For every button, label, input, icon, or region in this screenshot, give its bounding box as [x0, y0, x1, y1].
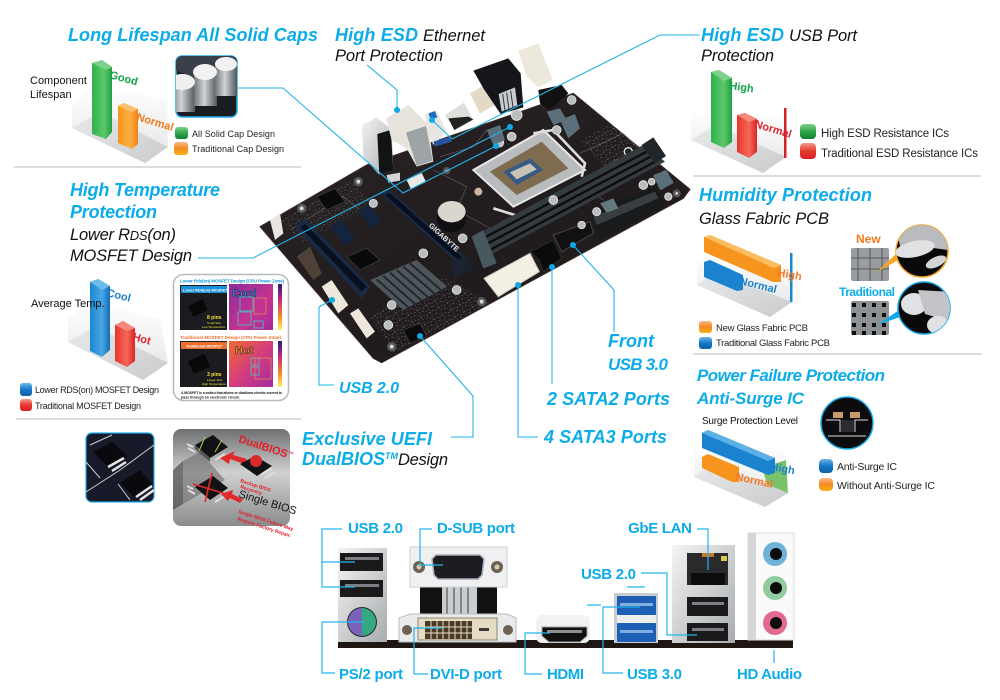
- photo lower: Lower RDS(on) MOSFET: [183, 288, 228, 292]
- slab: anti-surge: [702, 430, 775, 475]
- I/O leader: GbE LAN: [697, 529, 708, 570]
- heading: Humidity Protection: [699, 185, 872, 228]
- chokes: [487, 108, 673, 190]
- HDMI connector: [536, 615, 590, 643]
- leader line: SATA2: [551, 267, 553, 384]
- heading: High ESD USB: High ESD: [701, 25, 784, 45]
- I/O leader: HD Audio: [773, 650, 775, 663]
- PCIe x1 slots: [330, 204, 382, 245]
- label: good: Good: [108, 69, 139, 88]
- chips on board: [317, 188, 427, 343]
- bar: normal: [118, 103, 138, 149]
- heading: High ESD Ethernet: High ESD: [335, 25, 418, 45]
- legend: surge: [819, 459, 935, 492]
- label: Traditional: Traditional: [839, 285, 895, 299]
- CPU socket: [473, 130, 585, 217]
- heading: Power Failure: Power Failure Protection: [697, 366, 885, 385]
- bar: normal: [737, 113, 757, 158]
- dense components right: [580, 123, 643, 173]
- label: high: High: [776, 267, 803, 283]
- panel title traditional: Traditional MOSFET Design (CPU Power Zone): [180, 335, 281, 340]
- legend: caps: Traditional Cap Design: [192, 144, 284, 154]
- I/O label: USB 3.0: USB 3.0: [627, 666, 682, 683]
- USB 3.0 stack: [614, 593, 658, 643]
- chart floor: [68, 326, 168, 380]
- leader line: USB 2.0 header: [319, 300, 334, 385]
- front panel header white pins: [350, 308, 375, 338]
- legend: ESD: Traditional ESD Resistance ICs: [821, 148, 978, 160]
- label: Front USB 3.0: [608, 331, 669, 374]
- axis label: Component: [30, 75, 87, 87]
- heading: UEFI DualBIOS: Exclusive UEFI: [302, 429, 433, 449]
- chart wall: [72, 85, 168, 163]
- colour scale: [278, 341, 282, 387]
- chipset heatsink: [370, 260, 447, 310]
- dense components upper left: [280, 180, 373, 243]
- axis label: Average Temp.: [31, 298, 105, 310]
- legend: MOSFET: [20, 383, 159, 411]
- board outline: [260, 93, 690, 363]
- leader line: High Temperature: [198, 127, 510, 258]
- slab: new: [704, 235, 781, 282]
- SATA connectors black: [531, 240, 562, 272]
- heading: UEFI DualBIOS: [302, 429, 448, 469]
- green wall section: [762, 460, 788, 493]
- leader line: Ethernet: [367, 65, 397, 110]
- image: anti-surge IC: [821, 397, 873, 449]
- VGA connector: [410, 547, 507, 616]
- legend: caps: [174, 127, 284, 155]
- chart floor: [72, 112, 168, 163]
- thermal image cool: Cool: [232, 288, 256, 300]
- fabric swatch: traditional: [851, 301, 903, 335]
- power connector top right: [538, 85, 568, 110]
- I/O label: D-SUB: D-SUB port: [437, 520, 515, 537]
- panel: lifespan chart: [30, 60, 175, 163]
- dense components lower edge: [370, 277, 490, 353]
- I/O label: USB 2.0 right: USB 2.0: [581, 566, 636, 583]
- label: USB 2.0 header: USB 2.0: [339, 380, 399, 397]
- footnote second line: pass through an electronic circuit.: [181, 396, 240, 400]
- legend: MOSFET: Lower RDS(on) MOSFET Design: [35, 385, 159, 395]
- CMOS battery: [437, 201, 466, 232]
- bar: cool: [90, 279, 110, 357]
- heading: Long Lifespan: Long Lifespan All Solid Caps: [68, 25, 318, 45]
- divider: [693, 175, 981, 177]
- panel: rear I/O: [338, 533, 794, 648]
- fabric closeup: traditional: [898, 282, 952, 334]
- photo lower: Low Temperature: [202, 325, 225, 329]
- image: capacitors: [169, 56, 237, 117]
- photo traditional: Larger Size: [207, 378, 223, 382]
- footnote: A MOSFET is a switch that allows or disallows electric current to: [181, 391, 283, 395]
- photo traditional: [180, 341, 227, 387]
- heading: UEFI DualBIOS: DualBIOS: [302, 449, 385, 469]
- bar: good: [92, 60, 112, 139]
- ATX power connector: [590, 170, 673, 240]
- photo lower: 8 pins: [207, 315, 222, 321]
- thermal image hot: Hot: [235, 345, 254, 357]
- I/O leader: DVI-D: [414, 628, 442, 674]
- USB 3.0 header: [553, 222, 593, 252]
- recovery note: Backup BIOS: [239, 478, 272, 494]
- chart floor: [697, 272, 792, 317]
- label: 4 SATA3: 4 SATA3 Ports: [543, 427, 667, 447]
- I/O: USB 3.0: [425, 111, 452, 147]
- panel title lower: Lower Rds(on) MOSFET Design (CPU Power Zone): [180, 278, 284, 284]
- PCIe x16 slot upper: [381, 189, 473, 278]
- leader line: Long Lifespan caps: [238, 88, 496, 193]
- heading: High Temperature: MOSFET Design: [70, 247, 192, 265]
- label: cool: Cool: [105, 287, 132, 305]
- arrow: single BIOS: [221, 490, 243, 503]
- image: BIOS chips: [86, 433, 154, 502]
- DVI connector: [399, 614, 516, 642]
- USB header white pins: [322, 280, 348, 313]
- I/O leader: PS/2: [322, 622, 363, 673]
- legend: surge: Without Anti-Surge IC: [837, 480, 935, 492]
- legend: surge: Anti-Surge IC: [837, 461, 897, 473]
- chart wall: [691, 110, 786, 173]
- silkscreen text: GIGABYTE: [427, 221, 461, 254]
- I/O: VGA: [473, 58, 523, 114]
- fabric closeup: new: [894, 225, 948, 277]
- heading: High ESD USB: [701, 25, 858, 65]
- label: high: High: [769, 461, 796, 477]
- label: 2 SATA2: 2 SATA2 Ports: [546, 389, 670, 409]
- legend: PCB: Traditional Glass Fabric PCB: [716, 338, 830, 349]
- I/O label: PS/2: PS/2 port: [339, 666, 403, 683]
- slab highlight: [704, 235, 781, 268]
- heading: Humidity Protection: Humidity Protection: [699, 185, 872, 205]
- label: Front USB 3.0: USB 3.0: [608, 355, 669, 374]
- divider: [693, 353, 982, 355]
- leader line: USB port: [432, 35, 700, 139]
- I/O: DVI: [470, 84, 495, 113]
- chip: single BIOS: [187, 473, 228, 502]
- callout dots: [329, 107, 576, 339]
- capacitors: [369, 96, 672, 329]
- I/O leader: HDMI: [525, 633, 550, 674]
- label: high: High: [729, 80, 755, 95]
- heading: High Temperature: High Temperature: [70, 180, 220, 200]
- wall edge: [784, 108, 786, 158]
- heading: High Temperature: Protection: [70, 202, 157, 222]
- chart floor: [694, 462, 788, 507]
- heading: Power Failure: [696, 366, 885, 408]
- label: New: New: [856, 232, 881, 246]
- legend: ESD: High ESD Resistance ICs: [821, 128, 949, 140]
- circuit traces: [290, 130, 637, 230]
- I/O shield: LAN and USB: [386, 105, 433, 167]
- label: normal: Normal: [135, 111, 175, 134]
- chart wall: [68, 300, 168, 380]
- heading: Humidity Protection: Glass Fabric PCB: [699, 210, 829, 228]
- label: DualBIOS: ™: [287, 450, 294, 459]
- audio jacks: [748, 533, 794, 640]
- panel: surge chart: [694, 430, 796, 507]
- I/O: HDMI: [445, 103, 473, 131]
- fabric swatch: new: [851, 248, 902, 281]
- photo lower: [180, 285, 228, 330]
- legend: PCB: New Glass Fabric PCB: [716, 323, 808, 334]
- heading: UEFI DualBIOS: TM: [385, 451, 399, 461]
- leader line: SATA3: [518, 285, 538, 437]
- legend: ESD: [800, 124, 978, 160]
- small white parts: [407, 148, 632, 189]
- photo traditional: 3 pins: [207, 372, 222, 378]
- RAM slots: [472, 137, 666, 268]
- chip: backup BIOS: [240, 455, 275, 478]
- heading: Power Failure: Anti-Surge IC: [696, 389, 805, 408]
- photo lower: Small Size: [207, 321, 222, 325]
- failure note: Single BIOS Failure May: [237, 509, 294, 533]
- LAN and USB stack: [672, 545, 735, 643]
- axis label second line: Lifespan: [30, 89, 72, 101]
- I/O leader: USB 2.0 right: [641, 573, 697, 635]
- colour scale: [278, 284, 282, 330]
- heading: High Temperature: [70, 180, 220, 265]
- failure note second line: Require Factory Repair.: [236, 516, 292, 539]
- USB and PS/2 stack: [338, 548, 387, 642]
- SATA connectors white: [484, 253, 539, 297]
- label: DualBIOS: DualBIOS: [237, 433, 289, 461]
- photo traditional: Traditional MOSFET: [186, 344, 223, 348]
- arrow: recovery: [220, 451, 247, 464]
- legend: PCB: [699, 321, 830, 349]
- label: normal: Normal: [734, 471, 774, 491]
- heading: High Temperature: Lower RDS(on): [70, 226, 176, 244]
- leader line: UEFI DualBIOS: [420, 336, 473, 437]
- I/O label: HD Audio: HD Audio: [737, 666, 802, 683]
- chip: main BIOS: [187, 435, 228, 462]
- legend: caps: All Solid Cap Design: [192, 129, 275, 139]
- heading: High ESD USB: USB Port: [789, 27, 858, 45]
- heading: High ESD Ethernet: [335, 25, 486, 65]
- wall edge: [790, 253, 792, 302]
- I/O leader: USB 2.0: [322, 529, 355, 587]
- label: Single BIOS: Single BIOS: [237, 488, 298, 517]
- leader line: Front USB 3.0: [573, 245, 614, 332]
- heading: High ESD Ethernet: Ethernet: [423, 27, 486, 45]
- I/O label: USB 2.0: USB 2.0: [348, 520, 403, 537]
- heading: UEFI DualBIOS: Design: [398, 451, 448, 469]
- slab highlight: [702, 430, 775, 461]
- divider: [16, 418, 301, 420]
- heading: High ESD USB: Protection: [701, 47, 774, 65]
- panel: humidity chart: [697, 235, 803, 317]
- PCB strip: [338, 640, 793, 648]
- bar: hot: [115, 321, 135, 367]
- I/O leader: USB 3.0: [587, 587, 645, 673]
- chart floor: [691, 125, 786, 173]
- I/O label: DVI-D: DVI-D port: [430, 666, 502, 683]
- I/O leader: D-SUB: [420, 529, 443, 565]
- I/O: audio: [518, 43, 553, 87]
- panel: ESD chart: [691, 70, 793, 173]
- slab: traditional: [704, 260, 743, 291]
- label: hot: Hot: [131, 331, 152, 348]
- slab: without: [702, 454, 739, 482]
- axis label: surge: Surge Protection Level: [702, 416, 798, 427]
- divider: [14, 166, 301, 168]
- recovery note second line: Recovery: [239, 484, 263, 497]
- label: Front USB 3.0: Front: [608, 331, 655, 351]
- I/O label: GbE LAN: GbE LAN: [628, 520, 692, 537]
- photo traditional: High Temperature: [202, 382, 226, 386]
- panel: temperature chart: [31, 279, 168, 380]
- PCIe x16 slot lower: [295, 218, 371, 298]
- panel: MOSFET thermal comparison: [174, 274, 288, 400]
- label: normal: Normal: [753, 118, 793, 141]
- bar: high: [711, 70, 732, 148]
- chart wall: [694, 445, 788, 507]
- label: normal: Normal: [738, 275, 778, 296]
- panel: DualBIOS diagram: [173, 429, 298, 526]
- I/O shield: USB and PS/2: [362, 117, 400, 183]
- chart wall: [697, 255, 792, 317]
- mounting holes: [298, 168, 679, 350]
- motherboard photo: [260, 43, 690, 363]
- I/O label: HDMI: HDMI: [547, 666, 584, 683]
- heading: High ESD Ethernet: Port Protection: [335, 47, 443, 65]
- legend: MOSFET: Traditional MOSFET Design: [35, 401, 141, 411]
- fan header: [270, 213, 283, 240]
